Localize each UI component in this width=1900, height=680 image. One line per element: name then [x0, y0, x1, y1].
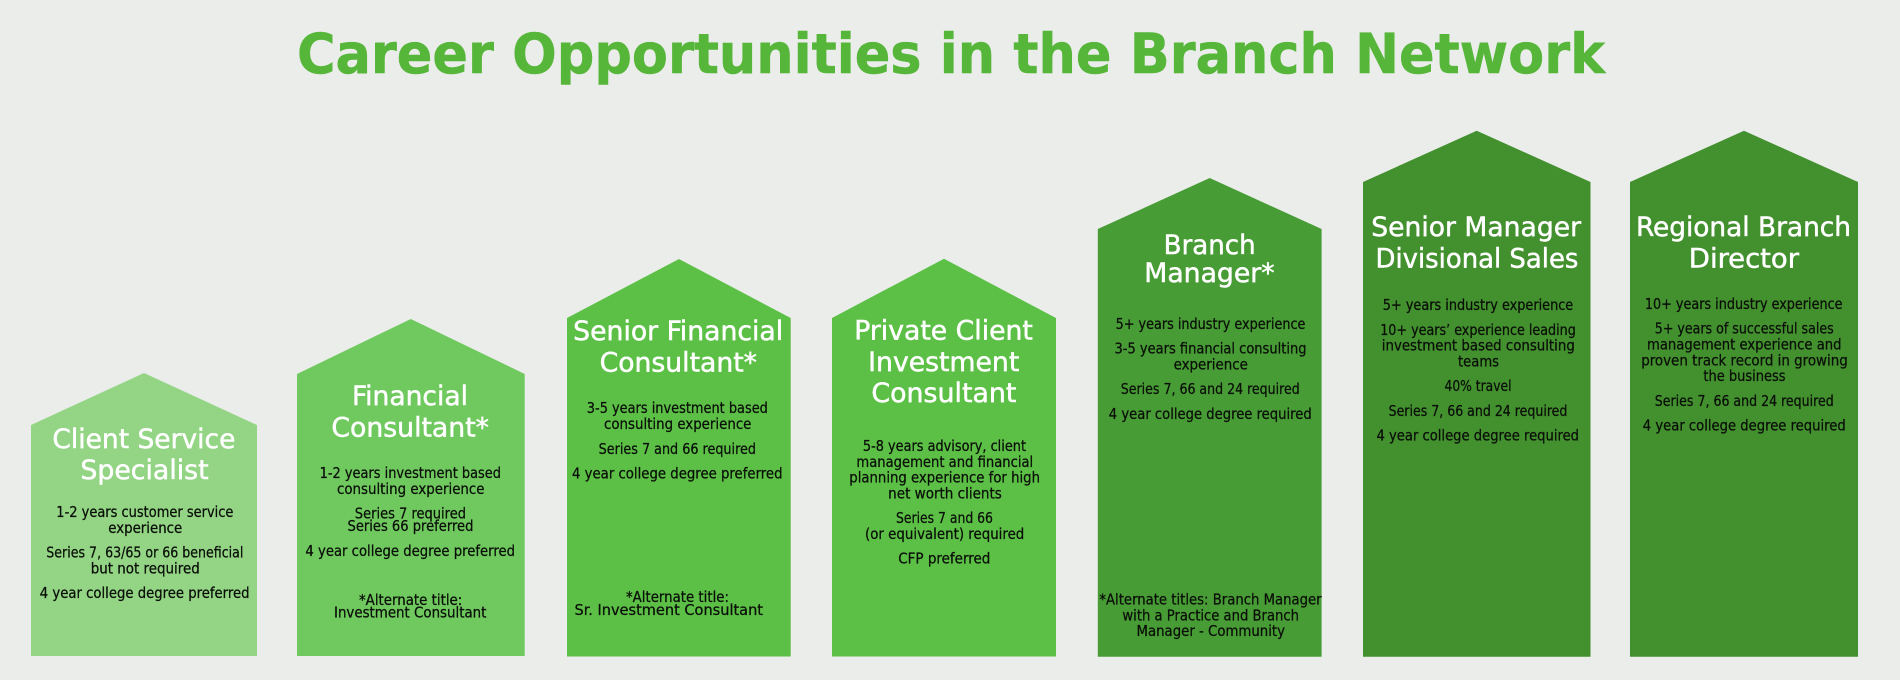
requirements text — [1109, 315, 1312, 423]
heading: Consultant* — [600, 348, 757, 379]
requirements text: Series 7, 63/65 or 66 beneficial — [46, 544, 243, 562]
panel: Financial Consultant — [297, 319, 525, 656]
heading: Private Client — [854, 316, 1033, 347]
footnote: alternate title — [574, 588, 763, 619]
footnote: alternate title: *Alternate title: — [359, 591, 462, 609]
panel: Senior Manager Divisional Sales — [1363, 131, 1590, 657]
requirements text — [40, 503, 249, 602]
requirements text: 4 year college degree required — [1643, 417, 1846, 435]
requirements text: 10+ years’ experience leading — [1380, 321, 1576, 339]
requirements text: 4 year college degree preferred — [572, 465, 782, 483]
requirements text: experience — [1174, 355, 1248, 373]
requirements text: consulting experience — [604, 415, 751, 433]
panel: Client Service Specialist — [31, 373, 257, 656]
footnote: alternate title: *Alternate title: — [626, 588, 729, 606]
requirements text — [849, 437, 1040, 568]
heading — [573, 316, 783, 379]
heading: Director — [1689, 244, 1799, 274]
requirements text: Series 7, 66 and 24 required — [1389, 402, 1567, 420]
requirements text: (or equivalent) required — [865, 525, 1024, 543]
heading — [331, 381, 489, 444]
requirements text: but not required — [91, 560, 200, 578]
requirements text: 4 year college degree preferred — [305, 542, 515, 560]
house shape — [832, 259, 1056, 656]
heading: Specialist — [80, 455, 209, 486]
footnote: alternate titles — [1099, 591, 1322, 640]
house shape — [31, 373, 257, 656]
footnote: alternate title — [334, 591, 486, 622]
panel: Branch Manager — [1098, 178, 1322, 657]
requirements text: Series 7, 66 and 24 required — [1121, 380, 1300, 398]
footnote: alternate title: Sr. Investment Consultant — [574, 601, 763, 619]
requirements text — [1641, 295, 1848, 435]
heading: Financial — [352, 381, 468, 412]
heading — [1144, 230, 1275, 289]
requirements text — [1376, 296, 1579, 445]
requirements text: 3-5 years investment based — [587, 399, 768, 417]
requirements text: management experience and — [1647, 335, 1842, 353]
heading — [1636, 212, 1851, 274]
heading — [52, 424, 235, 486]
requirements text: 1-2 years customer service — [56, 503, 233, 521]
heading: Manager* — [1144, 258, 1275, 289]
requirements text: 3-5 years financial consulting — [1114, 340, 1306, 358]
requirements text: Series 66 preferred — [348, 517, 473, 535]
heading — [1371, 212, 1581, 274]
requirements text: 1-2 years investment based — [320, 464, 501, 482]
panel: Senior Financial Consultant — [567, 259, 791, 656]
house shape — [1630, 131, 1858, 657]
house shape — [1363, 131, 1590, 657]
requirements text: CFP preferred — [898, 550, 990, 568]
title: Career Opportunities in the Branch Network — [297, 22, 1606, 86]
requirements text: 10+ years industry experience — [1645, 295, 1842, 313]
requirements text: teams — [1458, 352, 1499, 370]
requirements text: Series 7 required — [355, 505, 466, 523]
heading: Branch — [1164, 230, 1256, 261]
house shape — [1098, 178, 1322, 657]
heading: Investment — [868, 347, 1019, 378]
requirements text: proven track record in growing — [1641, 351, 1848, 369]
requirements text: 4 year college degree required — [1109, 405, 1312, 423]
house shape — [567, 259, 791, 656]
heading — [854, 316, 1033, 409]
requirements text: Series 7, 66 and 24 required — [1655, 392, 1834, 410]
requirements text: consulting experience — [337, 480, 484, 498]
heading: Senior Manager — [1371, 212, 1581, 243]
requirements text: 4 year college degree preferred — [40, 584, 249, 602]
requirements text: 5-8 years advisory, client — [863, 437, 1026, 455]
requirements text: the business — [1703, 367, 1786, 385]
requirements text: 40% travel — [1444, 377, 1512, 395]
heading: Regional Branch — [1636, 212, 1851, 243]
heading: Consultant — [871, 378, 1016, 409]
requirements text: experience — [108, 519, 182, 537]
requirements text: 5+ years industry experience — [1116, 315, 1305, 333]
heading: Consultant* — [331, 413, 489, 444]
heading: Divisional Sales — [1376, 244, 1578, 274]
footnote: alternate title: Investment Consultant — [334, 604, 486, 622]
panel: Regional Branch Director — [1630, 131, 1858, 657]
house shape — [297, 319, 525, 656]
requirements text: management and financial — [856, 453, 1033, 471]
requirements text: Series 7 and 66 required — [599, 440, 756, 458]
footnote: alternate titles: with a Practice and Branch — [1122, 606, 1299, 624]
requirements text — [305, 464, 515, 560]
requirements text — [572, 399, 782, 483]
requirements text: net worth clients — [888, 485, 1002, 503]
requirements text: Series 7 and 66 — [896, 509, 993, 527]
requirements text: planning experience for high — [849, 469, 1040, 487]
heading: Client Service — [52, 424, 235, 455]
heading: Senior Financial — [573, 316, 783, 347]
requirements text: 5+ years of successful sales — [1655, 320, 1834, 338]
requirements text: investment based consulting — [1382, 337, 1575, 355]
requirements text: 5+ years industry experience — [1383, 296, 1573, 314]
requirements text: 4 year college degree required — [1376, 427, 1579, 445]
footnote: alternate titles: *Alternate titles: Branch Manager — [1099, 591, 1322, 609]
footnote: alternate titles: Manager - Community — [1136, 622, 1285, 640]
panel: Private Client Investment Consultant — [832, 259, 1056, 656]
